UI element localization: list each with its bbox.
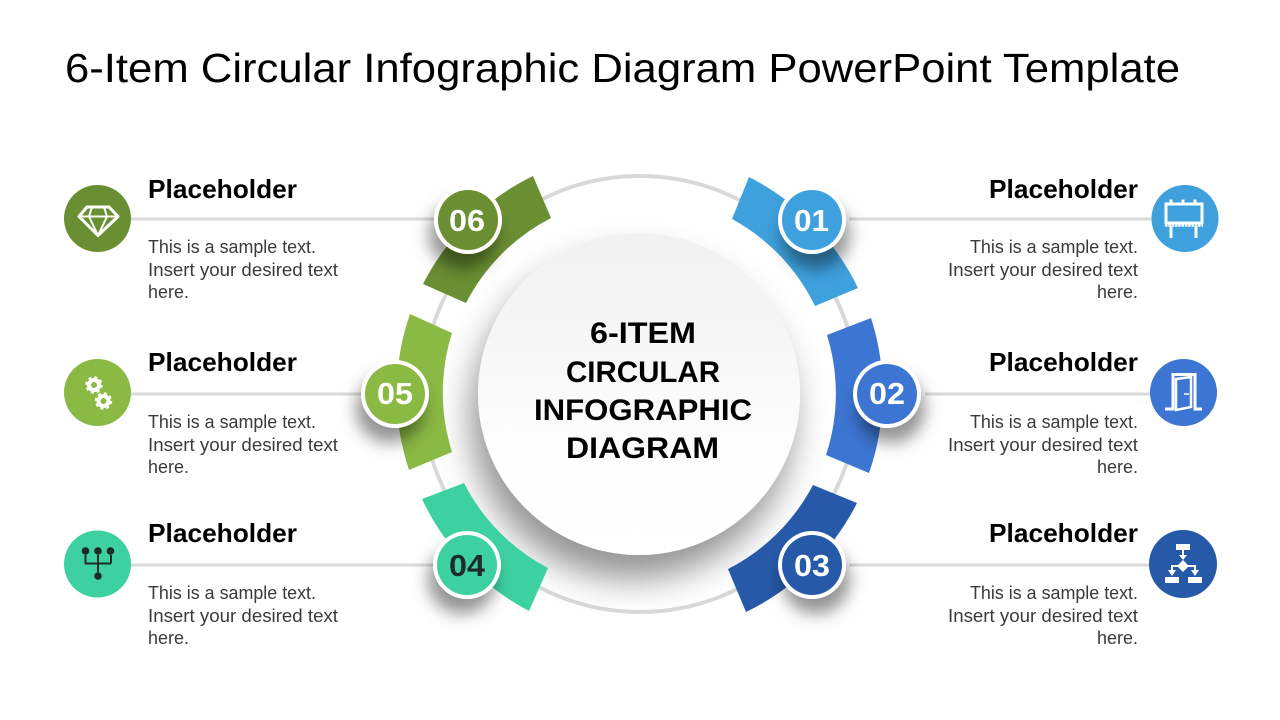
text block: item 03: This is a sample text.	[970, 583, 1138, 603]
text block: item 06: Insert your desired text	[148, 260, 338, 280]
text block: item 05: Placeholder	[148, 347, 297, 377]
text block: item 06: here.	[148, 282, 189, 302]
connector lines	[131, 219, 1152, 565]
text block: item 04: This is a sample text.	[148, 583, 316, 603]
center heading: 6-ITEM	[590, 317, 696, 350]
text block: item 02	[948, 347, 1138, 477]
icon: flowchart	[1149, 530, 1217, 598]
segment 05	[397, 314, 452, 470]
text block: item 04: Insert your desired text	[148, 606, 338, 626]
text block: item 04: Placeholder	[148, 518, 297, 548]
text block: item 05	[148, 347, 338, 477]
badge 01: 01	[794, 203, 829, 238]
badge 06: 06	[449, 203, 485, 238]
central circle	[478, 233, 800, 555]
center heading	[534, 317, 752, 465]
text block: item 01: here.	[1097, 282, 1138, 302]
text block: item 02: This is a sample text.	[970, 412, 1138, 432]
icon: diamond	[64, 185, 131, 252]
center heading: INFOGRAPHIC	[534, 394, 752, 427]
text block: item 05: This is a sample text.	[148, 412, 316, 432]
icon: billboard	[1152, 185, 1218, 252]
text block: item 02: Placeholder	[989, 347, 1138, 377]
center heading: CIRCULAR	[566, 356, 720, 389]
text block: item 06: This is a sample text.	[148, 237, 316, 257]
badge 01	[778, 186, 846, 254]
text block: item 05: Insert your desired text	[148, 435, 338, 455]
text block: item 01	[948, 174, 1138, 302]
segment 02	[826, 318, 883, 473]
text block: item 04	[148, 518, 338, 648]
segment 03	[728, 485, 857, 612]
icon: door	[1150, 359, 1217, 426]
title: 6-Item Circular Infographic Diagram PowerPoint Template	[65, 45, 1180, 91]
text block: item 03	[948, 518, 1138, 648]
badge 04	[433, 531, 501, 599]
badge 03	[778, 531, 846, 599]
badge 05	[361, 360, 429, 428]
text block: item 03: here.	[1097, 628, 1138, 648]
icon: hierarchy	[64, 530, 131, 598]
text block: item 01: Insert your desired text	[948, 260, 1138, 280]
badge 05: 05	[377, 376, 413, 411]
text block: item 03: Insert your desired text	[948, 606, 1138, 626]
badge 06	[434, 186, 502, 254]
badge 03: 03	[794, 548, 830, 583]
text block: item 02: Insert your desired text	[948, 435, 1138, 455]
text block: item 04: here.	[148, 628, 189, 648]
segment 06	[423, 176, 551, 303]
icon: gears	[64, 359, 131, 426]
text block: item 02: here.	[1097, 457, 1138, 477]
text block: item 01: This is a sample text.	[970, 237, 1138, 257]
outer ring	[422, 176, 858, 612]
text block: item 01: Placeholder	[989, 174, 1138, 204]
center heading: DIAGRAM	[566, 432, 719, 465]
badge 02	[853, 360, 921, 428]
text block: item 06	[148, 174, 338, 302]
text block: item 05: here.	[148, 457, 189, 477]
text block: item 03: Placeholder	[989, 518, 1138, 548]
segment 04	[422, 483, 548, 611]
segment 01	[732, 177, 858, 306]
badge 04: 04	[449, 548, 486, 583]
badge 02: 02	[869, 376, 905, 411]
text block: item 06: Placeholder	[148, 174, 297, 204]
